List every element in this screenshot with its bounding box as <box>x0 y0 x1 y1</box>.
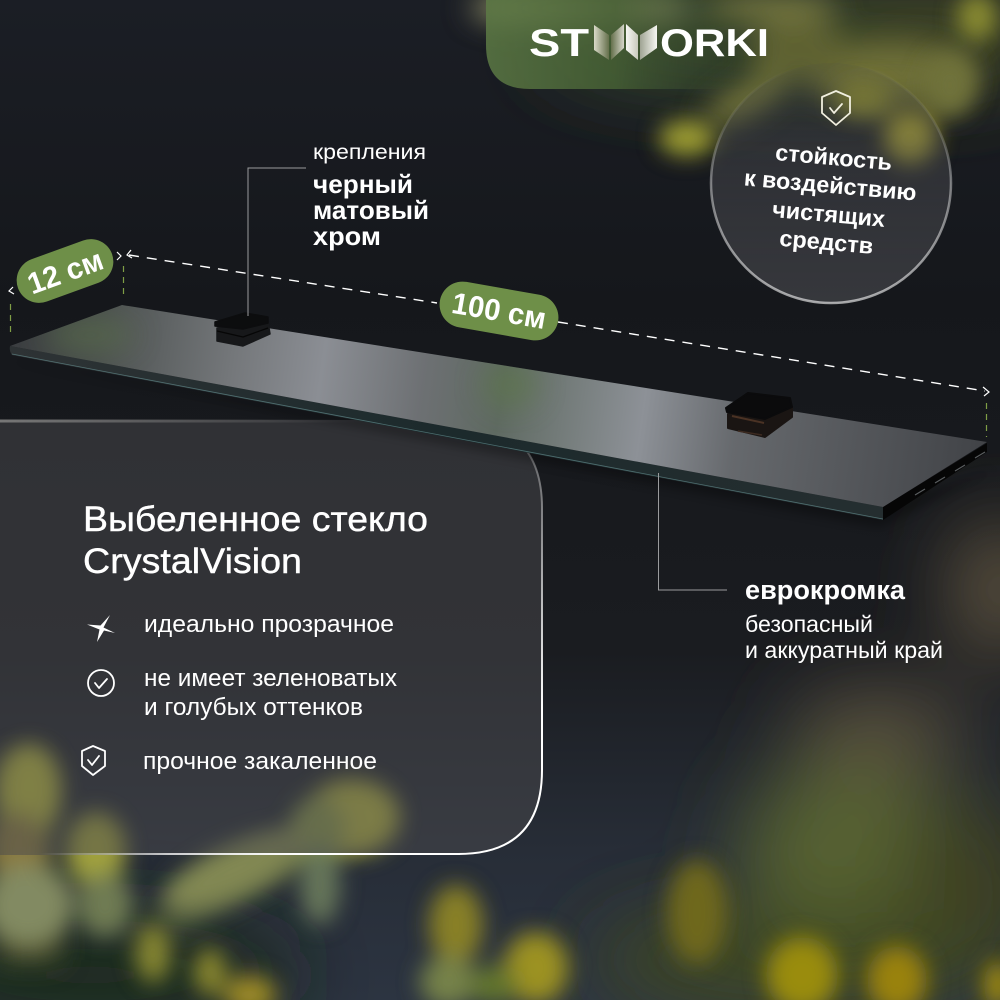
badge text: стойкость <box>774 139 893 175</box>
leader line: edge <box>658 473 727 590</box>
logo mark <box>594 24 657 60</box>
shelf top surface <box>10 305 987 507</box>
leader line: clip <box>248 168 306 316</box>
logo text ORKI: ORKI <box>660 22 769 65</box>
callout: clips <box>313 141 429 251</box>
clip left <box>215 313 270 346</box>
pill: 12 см <box>10 233 120 309</box>
pill: 12 см: 12 см <box>23 244 108 301</box>
list item: transparent: идеально прозрачное <box>144 611 394 638</box>
pill: 100 см: 100 см <box>449 287 549 336</box>
glass shelf <box>10 305 987 520</box>
panel heading: Выбеленное стекло <box>83 500 428 539</box>
panel heading: CrystalVision <box>83 542 302 581</box>
logo text ST: ST <box>529 22 589 65</box>
callout: edge <box>745 575 943 663</box>
list item: no tint: не имеет зеленоватых <box>144 665 397 692</box>
icon: check circle <box>88 670 114 696</box>
badge text <box>738 137 920 262</box>
callout: edge: и аккуратный край <box>745 637 943 663</box>
pill: 100 см <box>436 278 562 344</box>
dimension lines <box>9 250 989 437</box>
shelf front edge <box>10 346 883 520</box>
shelf shadow <box>10 360 995 528</box>
clip right <box>726 393 792 437</box>
glass panel background <box>0 420 543 855</box>
callout: edge: еврокромка <box>745 575 906 605</box>
logo tab <box>486 0 745 89</box>
icon: shield <box>822 91 850 125</box>
callout: edge: безопасный <box>745 611 873 637</box>
callout: clips: хром <box>313 221 381 251</box>
badge text: к воздействию <box>743 164 918 205</box>
callout: clips: матовый <box>313 195 429 225</box>
list item: tempered: прочное закаленное <box>143 748 377 775</box>
list item: no tint <box>144 665 397 721</box>
icon: sparkle <box>87 615 115 642</box>
panel heading <box>83 500 428 581</box>
badge: resistance <box>711 63 951 303</box>
callout: clips: черный <box>313 169 413 199</box>
badge text: чистящих <box>771 196 886 232</box>
list item: no tint: и голубых оттенков <box>144 694 363 721</box>
icon: shield check <box>82 746 105 775</box>
callout: clips: крепления <box>313 141 426 164</box>
badge text: средств <box>778 225 874 259</box>
